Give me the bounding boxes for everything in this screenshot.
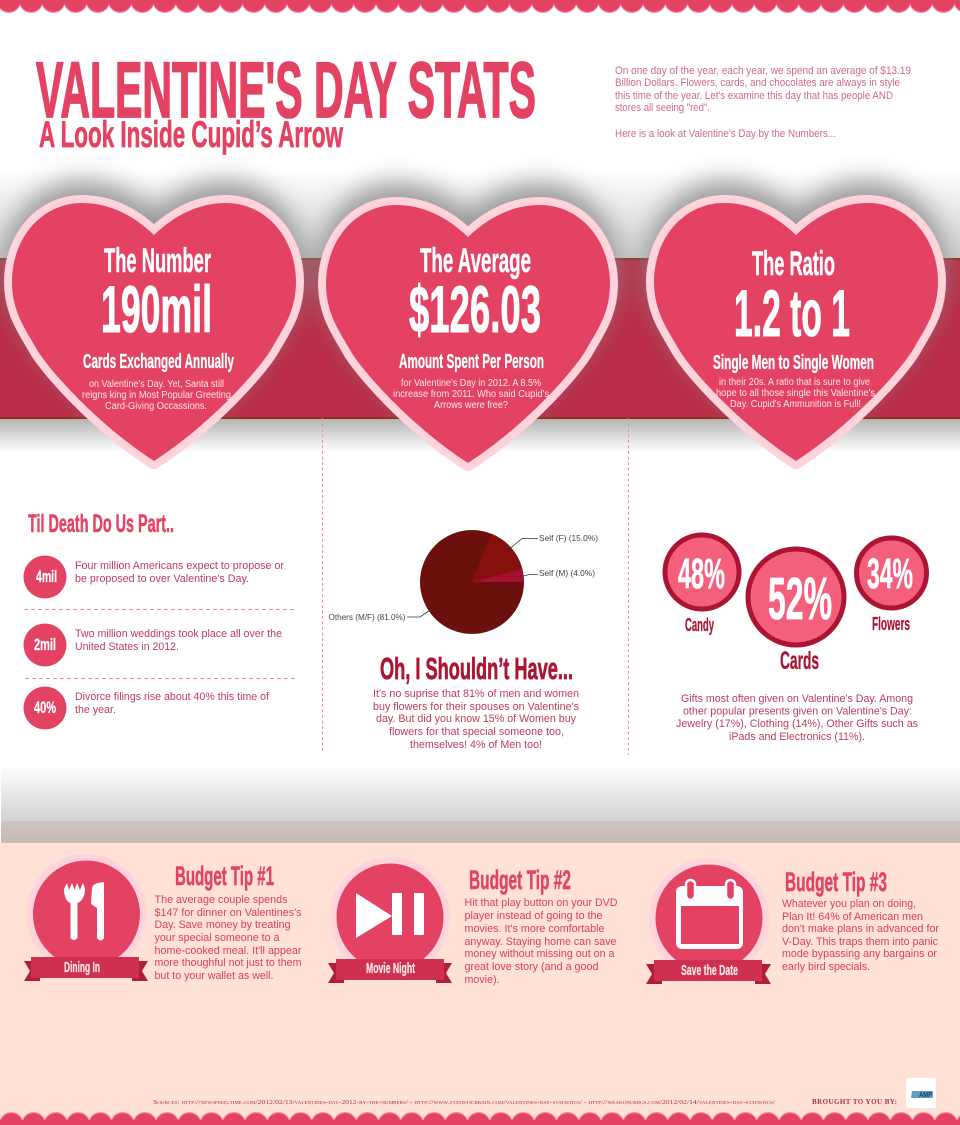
grey gradient above band bbox=[0, 170, 960, 258]
stat: candy bbox=[665, 535, 739, 635]
text: popular gifts bbox=[676, 693, 918, 743]
heart: the ratio: Day. Cupid's Ammunition is Full! bbox=[730, 399, 861, 410]
body text: Whatever you plan on doing, bbox=[782, 898, 916, 910]
stat: flowers: 34% bbox=[867, 550, 913, 598]
intro text: Here is a look at Valentine's Day by the Numbers... bbox=[615, 128, 836, 140]
heart: the average: Amount Spent Per Person bbox=[399, 351, 544, 373]
grey gradient below band bbox=[0, 419, 960, 452]
intro text bbox=[615, 65, 911, 140]
intro text: this time of the year. Let's examine this day that has people AND bbox=[615, 90, 893, 102]
intro text: Billion Dollars. Flowers, cards, and chocolates are always in style bbox=[615, 77, 900, 89]
heart: the number: on Valentine's Day. Yet, Santa still bbox=[89, 379, 224, 390]
tinted strip bbox=[1, 821, 960, 843]
pie chart: Self (F) (15.0%) bbox=[539, 533, 598, 543]
heart: the average: increase from 2011. Who said Cupid's bbox=[393, 389, 549, 400]
pie chart bbox=[328, 530, 598, 634]
body text: movie). bbox=[464, 974, 500, 986]
body text: anyway. Staying home can save bbox=[464, 936, 616, 948]
text: flower gifts: themselves! 4% of Men too! bbox=[410, 739, 542, 751]
icon: play pause bbox=[356, 893, 424, 938]
heart: the average: for Valentine's Day in 2012. A 8.5% bbox=[401, 378, 541, 389]
body text: Day. Save money by treating bbox=[154, 919, 290, 931]
body text: The average couple spends bbox=[154, 894, 288, 906]
heart: the number: reigns king in Most Popular Greeting bbox=[82, 390, 231, 401]
text: flower gifts: flowers for that special someone too, bbox=[389, 726, 564, 738]
heading: Budget Tip #3 bbox=[785, 867, 887, 897]
stat: 40% bbox=[24, 686, 270, 730]
stat: 40%: Divorce filings rise about 40% this time of bbox=[75, 691, 270, 703]
peach footer panel bbox=[0, 843, 960, 1125]
logo: AMP: AMP bbox=[919, 1092, 932, 1099]
stat: 4mil: Four million Americans expect to propose or bbox=[75, 560, 284, 572]
stat: 4mil: 4mil bbox=[36, 567, 57, 586]
heart: the number: 190mil bbox=[101, 272, 212, 346]
heart: the average: $126.03 bbox=[409, 272, 541, 346]
stat: flowers bbox=[856, 538, 926, 634]
badge: save the date: Save the Date bbox=[681, 962, 738, 979]
text: popular gifts: Jewelry (17%), Clothing (14%), Other Gifts such as bbox=[676, 718, 918, 730]
stat: cards: Cards bbox=[780, 647, 819, 675]
badge: dining in bbox=[24, 854, 148, 981]
stat: 4mil: be proposed to over Valentine's Day. bbox=[75, 573, 249, 585]
intro text: On one day of the year, each year, we spend an average of $13.19 bbox=[615, 65, 911, 77]
heart: the number: Card-Giving Occassions. bbox=[105, 401, 207, 412]
heart: the number: Cards Exchanged Annually bbox=[83, 351, 235, 373]
heart: the ratio: 1.2 to 1 bbox=[734, 276, 850, 350]
body text: early bird specials. bbox=[782, 961, 870, 973]
subtitle: A Look Inside Cupid’s Arrow bbox=[39, 114, 343, 155]
text: popular gifts: iPads and Electronics (11%). bbox=[729, 731, 865, 743]
body text: mode bypassing any bargains or bbox=[782, 948, 937, 960]
stat: 2mil: 2mil bbox=[34, 635, 56, 654]
body text: money without missing out on a bbox=[464, 948, 615, 960]
top scallop border bbox=[0, 0, 960, 14]
body text bbox=[782, 898, 939, 973]
body text: $147 for dinner on Valentines's bbox=[154, 907, 302, 919]
badge: movie night: Movie Night bbox=[366, 960, 415, 977]
body text: more thoughful not just to them bbox=[154, 957, 302, 969]
body text: Hit that play button on your DVD bbox=[464, 897, 618, 909]
heart: the ratio: The Ratio bbox=[752, 245, 835, 283]
heart: the average bbox=[326, 205, 610, 463]
body text: player instead of going to the bbox=[464, 910, 602, 922]
heart shadows bbox=[12, 189, 938, 449]
text: flower gifts: buy flowers for their spouses on Valentine's bbox=[373, 701, 579, 713]
grey gradient above tips bbox=[1, 765, 960, 821]
heart: the ratio: hope to all those single this Valentine's bbox=[716, 388, 875, 399]
heading: Budget Tip #1 bbox=[175, 861, 274, 891]
stat: 40%: the year. bbox=[75, 704, 116, 716]
stat: candy: 48% bbox=[678, 550, 725, 598]
pie chart: Self (M) (4.0%) bbox=[539, 568, 595, 578]
body text: great love story (and a good bbox=[464, 961, 598, 973]
body text: home-cooked meal. It'll appear bbox=[154, 945, 302, 957]
badge: save the date bbox=[646, 858, 771, 984]
stat: 2mil: United States in 2012. bbox=[75, 641, 179, 653]
text: flower gifts bbox=[373, 688, 579, 751]
heading: Til Death Do Us Part.. bbox=[28, 510, 174, 538]
badge: dining in: Dining In bbox=[64, 959, 100, 976]
budget tip 3 bbox=[646, 858, 939, 984]
stat: 2mil bbox=[24, 624, 282, 666]
heart: the number: The Number bbox=[104, 242, 211, 280]
body text: but to your wallet as well. bbox=[154, 970, 274, 982]
stat: flowers: Flowers bbox=[872, 614, 910, 634]
badge: movie night bbox=[328, 857, 452, 983]
text: flower gifts: day. But did you know 15% of Women buy bbox=[376, 713, 576, 725]
budget tip 2 bbox=[328, 857, 618, 986]
heading: oh i shouldn't have: Oh, I Shouldn’t Have... bbox=[380, 651, 573, 686]
stat: cards: 52% bbox=[768, 566, 832, 632]
logo: AMP bbox=[906, 1078, 936, 1108]
panel: gift percentages bbox=[665, 535, 926, 743]
sources: Sources: http://newsfeed.time.com/2012/02/13/valentines-day-2012-by-the-numbers/ - http://www.statisticbrain.com/valentines-day-statistics/ - http://weakonomics.com/2012/02/14/valentines-day-statistics/ bbox=[153, 1100, 775, 1106]
heart: the ratio bbox=[654, 203, 938, 461]
stat: 40%: 40% bbox=[34, 698, 56, 717]
panel: til death do us part bbox=[24, 510, 284, 730]
pie chart: Others (M/F) (81.0%) bbox=[328, 612, 406, 622]
bottom scallop border bbox=[0, 1105, 960, 1125]
icon: fork and knife bbox=[64, 882, 104, 940]
body text: V-Day. This traps them into panic bbox=[782, 936, 938, 948]
body text: movies. It's more comfortable bbox=[464, 923, 604, 935]
stat: 4mil bbox=[24, 556, 284, 598]
text: flower gifts: It's no suprise that 81% of men and women bbox=[373, 688, 579, 700]
text: popular gifts: other popular presents given on Valentine's Day: bbox=[683, 706, 912, 718]
heart: the average: Arrows were free? bbox=[434, 400, 508, 411]
red band bbox=[0, 258, 960, 419]
body text: your special someone to a bbox=[154, 932, 280, 944]
body text: don't make plans in advanced for bbox=[782, 923, 939, 935]
heart: the average: The Average bbox=[420, 242, 531, 280]
heart: the ratio: in their 20s. A ratio that is sure to give bbox=[719, 377, 870, 388]
intro text: stores all seeing "red". bbox=[615, 102, 710, 114]
body text bbox=[464, 897, 618, 986]
body text: Plan It! 64% of American men bbox=[782, 911, 923, 923]
stat: 2mil: Two million weddings took place all over the bbox=[75, 628, 282, 640]
body text bbox=[154, 894, 302, 982]
text: popular gifts: Gifts most often given on Valentine's Day. Among bbox=[681, 693, 913, 705]
dashed column dividers bbox=[322, 418, 628, 755]
heading: Budget Tip #2 bbox=[469, 865, 571, 895]
icon: calendar bbox=[676, 880, 743, 949]
stat: cards bbox=[748, 549, 844, 675]
stat: candy: Candy bbox=[685, 615, 714, 635]
brought to you by: BROUGHT TO YOU BY: bbox=[812, 1098, 897, 1106]
heart: the number bbox=[12, 203, 296, 461]
budget tip 1 bbox=[24, 854, 302, 982]
